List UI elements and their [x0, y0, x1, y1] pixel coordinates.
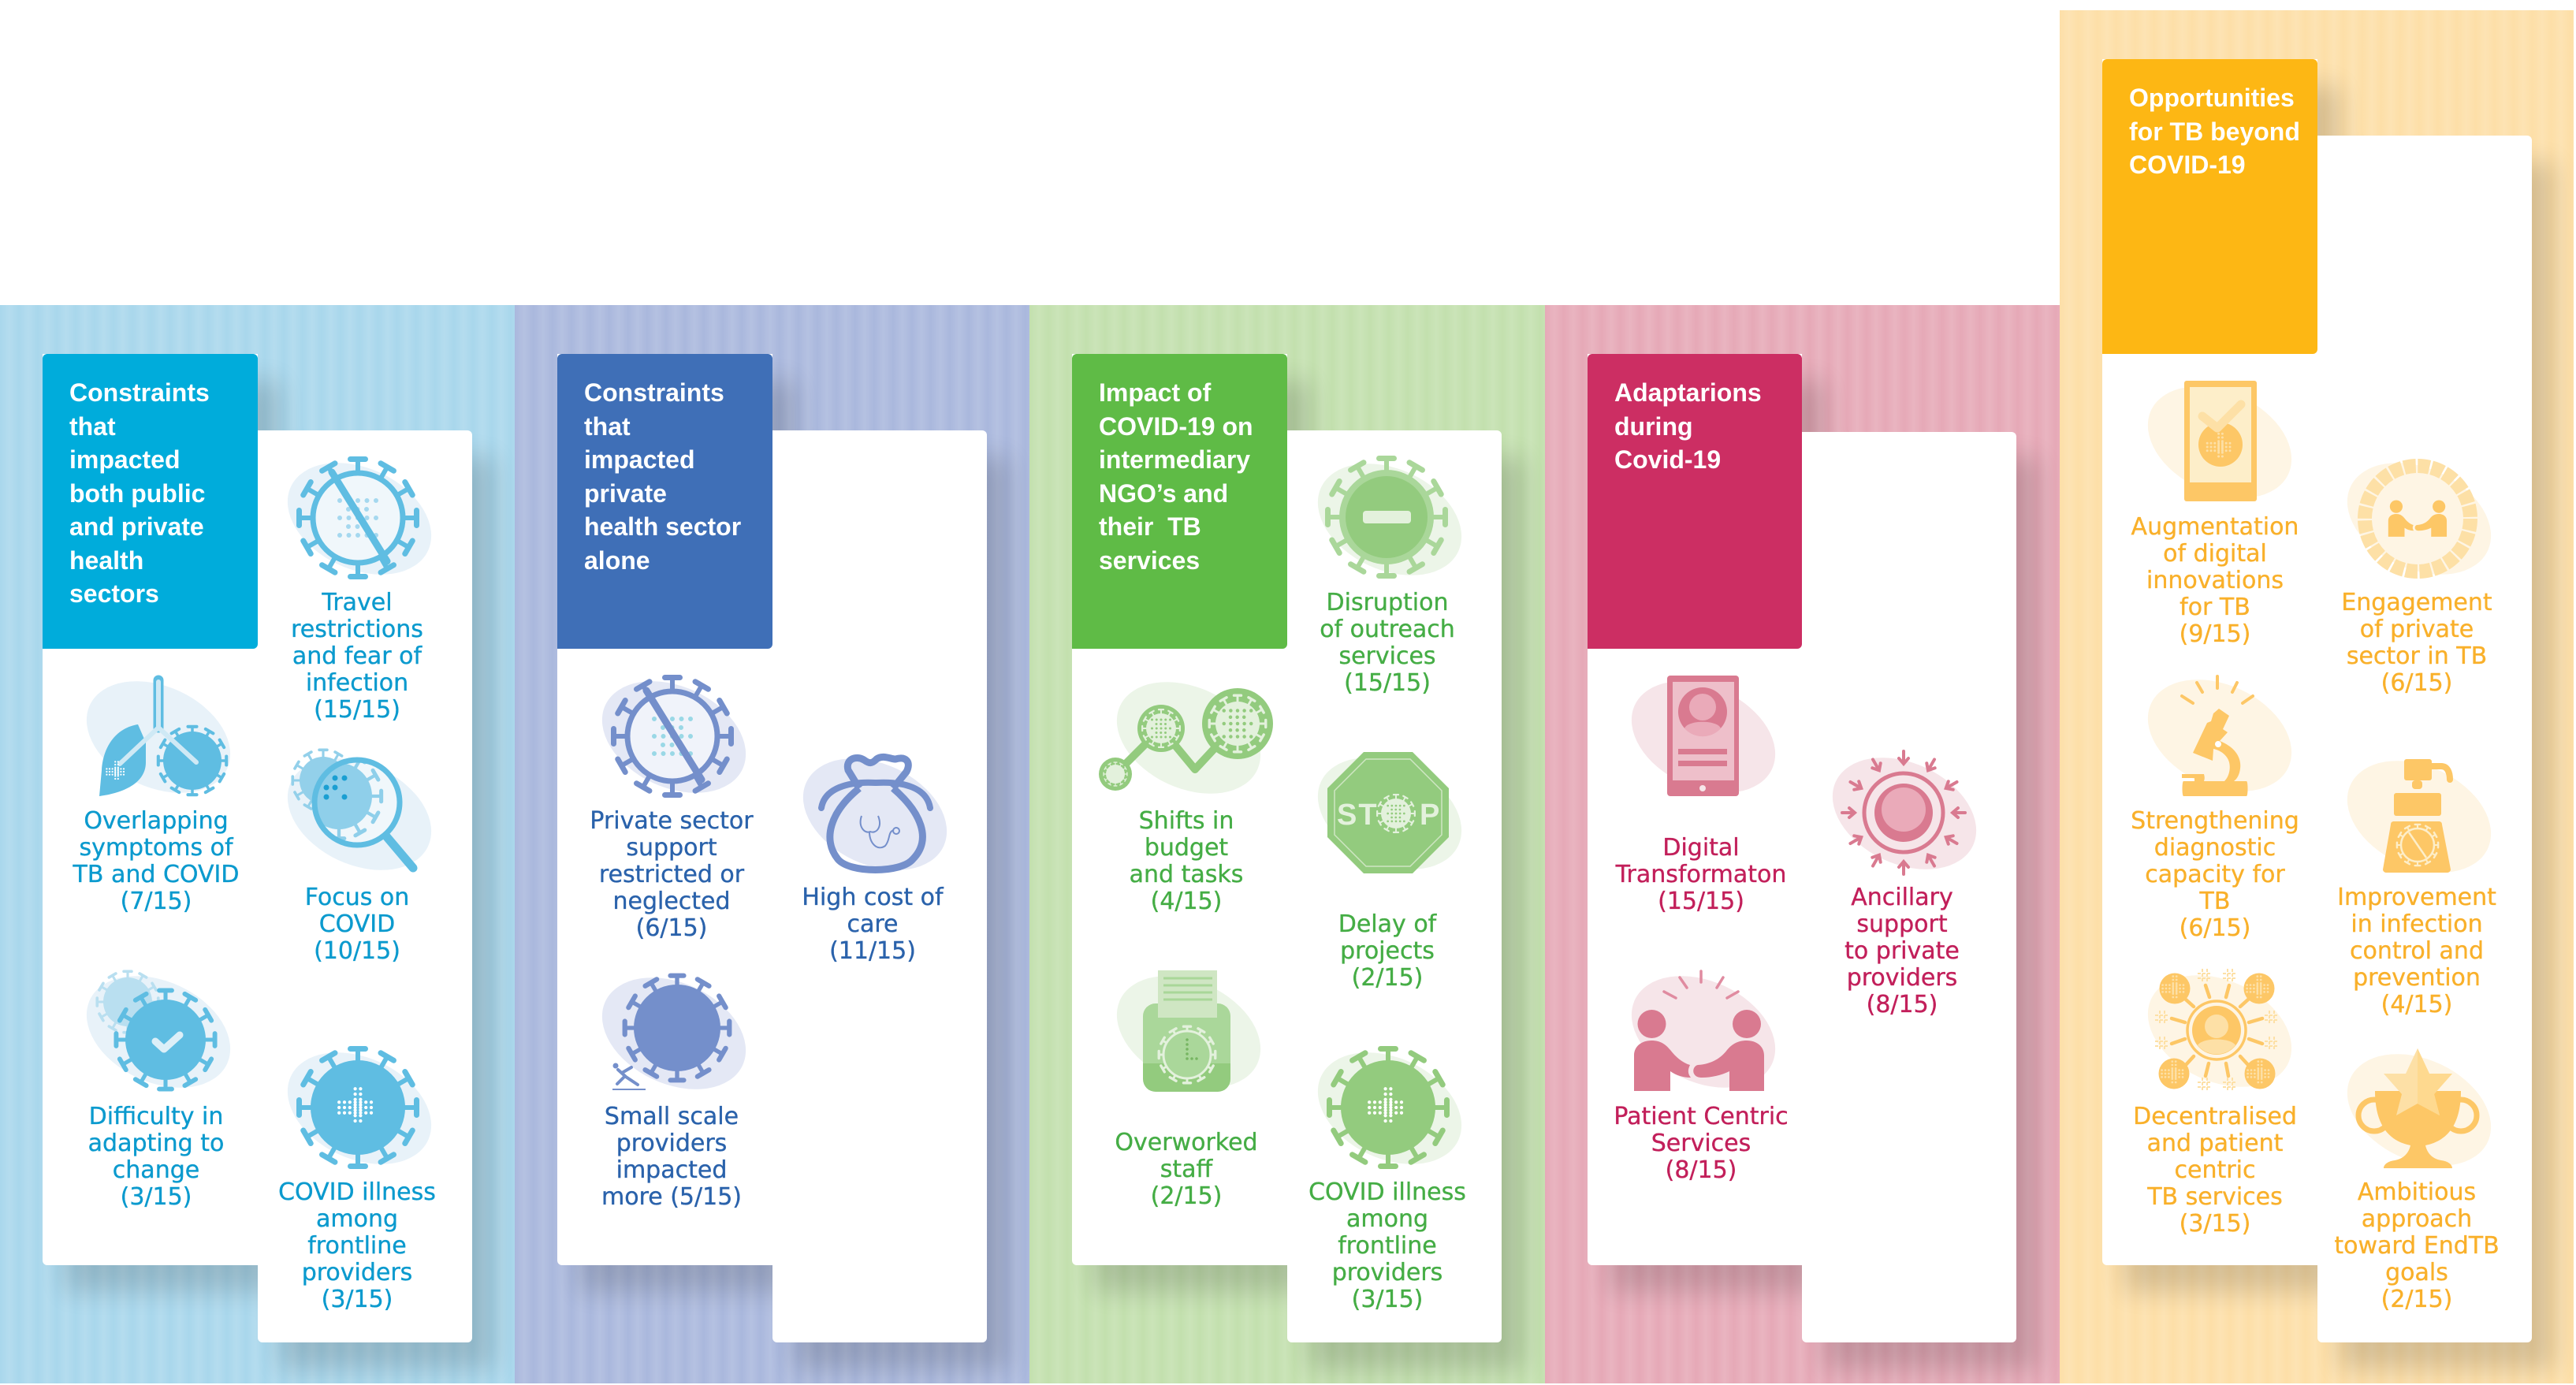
label: shifts in budget — [1130, 807, 1243, 915]
label: infection control: (4/15) — [2381, 991, 2452, 1018]
label: travel restrictions — [291, 589, 423, 724]
label: patient centric services: Services — [1651, 1130, 1751, 1157]
label: digital innovations: innovations — [2146, 567, 2284, 594]
icon: virus with minus — [1318, 456, 1461, 579]
label: strengthening diagnostic capacity: TB — [2200, 888, 2230, 915]
item: decentralised services — [2116, 970, 2314, 1236]
label: patient centric services: Patient Centric — [1614, 1103, 1789, 1130]
item: patient centric services — [1603, 970, 1800, 1182]
panel: impact of covid on NGOs — [1029, 305, 1545, 1383]
label: decentralised services: TB services — [2147, 1183, 2283, 1211]
label: private sector support: neglected — [612, 888, 731, 915]
heading: opportunities: COVID-19 — [2129, 151, 2246, 179]
label: private sector support: (6/15) — [636, 914, 707, 942]
icon: two people handshake — [1631, 970, 1776, 1093]
heading: impact on NGOs: intermediary — [1099, 445, 1250, 474]
label: overlapping symptoms: TB and COVID — [73, 861, 239, 888]
label: delay of projects: projects — [1340, 937, 1435, 965]
panel: opportunities for TB beyond covid-19 — [2060, 10, 2574, 1383]
label: shifts in budget: and tasks — [1130, 861, 1243, 888]
label: small scale providers: impacted — [616, 1156, 727, 1184]
label: ambitious approach: goals — [2385, 1259, 2448, 1286]
label: private sector support: Private sector — [590, 807, 754, 835]
icon: crossed-out virus — [602, 675, 746, 798]
label: private sector support: support — [626, 834, 717, 862]
label: ambitious approach: Ambitious — [2358, 1178, 2476, 1206]
label: disruption: services — [1338, 642, 1436, 670]
label: ambitious approach: (2/15) — [2381, 1286, 2452, 1313]
label: covid illness: among — [316, 1205, 398, 1233]
label: small scale providers: Small scale — [605, 1103, 739, 1130]
heading: opportunities: Opportunities — [2129, 84, 2295, 112]
label: digital innovations: of digital — [2163, 540, 2267, 568]
label: small scale providers: providers — [616, 1130, 727, 1157]
label: decentralised services — [2116, 1104, 2314, 1238]
item: high cost of care — [802, 754, 947, 965]
heading: constraints both sectors: impacted — [69, 445, 180, 474]
panel: constraints impacting both public and private health sectors — [0, 305, 515, 1383]
label: digital innovations: (9/15) — [2180, 620, 2250, 648]
label: covid illness: COVID illness — [1308, 1178, 1466, 1206]
heading: constraints both sectors: health — [69, 545, 143, 574]
heading: opportunities: for TB beyond — [2129, 117, 2300, 145]
label: travel restrictions: restrictions — [291, 616, 423, 643]
label: overlapping symptoms: Overlapping — [84, 807, 229, 835]
item: overworked staff — [1115, 970, 1260, 1210]
label: high cost of care: care — [847, 910, 899, 938]
white card — [1588, 354, 2016, 1342]
heading: constraints private sector: impacted — [584, 445, 694, 474]
icon: lungs and virus — [87, 675, 230, 796]
label: delay of projects — [1338, 910, 1437, 992]
label: covid illness: COVID illness — [278, 1178, 436, 1206]
label: difficulty adapting — [88, 1103, 224, 1211]
heading: impact on NGOs: Impact of — [1099, 378, 1211, 407]
heading: constraints both sectors: that — [69, 411, 116, 440]
label: disruption: of outreach — [1320, 616, 1455, 643]
label: shifts in budget: budget — [1145, 834, 1228, 862]
heading: constraints both sectors: Constraints — [69, 378, 210, 407]
label: digital innovations: for TB — [2180, 594, 2250, 621]
label: patient centric services: (8/15) — [1666, 1156, 1737, 1184]
item: disruption of outreach — [1318, 456, 1461, 697]
label: infection control — [2318, 884, 2515, 1018]
label: patient centric services — [1603, 1104, 1800, 1184]
label: digital transformation: Digital — [1662, 834, 1740, 862]
item: ambitious approach — [2318, 1048, 2515, 1312]
heading: constraints private sector — [557, 354, 772, 649]
item: covid illness among providers — [278, 1046, 436, 1313]
label: difficulty adapting: adapting to — [88, 1130, 224, 1157]
label: focus on covid: Focus on — [305, 884, 409, 911]
item: travel restrictions — [288, 456, 431, 724]
icon: trophy with star — [2347, 1048, 2492, 1171]
item: infection control — [2318, 755, 2515, 1017]
label: overlapping symptoms — [73, 807, 239, 915]
label: overworked staff: (2/15) — [1151, 1182, 1222, 1210]
icon: money bag with stethoscope — [803, 754, 947, 873]
label: shifts in budget: Shifts in — [1139, 807, 1234, 835]
label: infection control: Improvement — [2337, 884, 2496, 911]
item: small scale providers — [601, 973, 746, 1211]
heading: opportunities — [2102, 59, 2317, 354]
label: decentralised services: (3/15) — [2180, 1210, 2250, 1238]
label: engagement of private sector: sector in TB — [2347, 642, 2487, 670]
label: covid illness: among — [1346, 1205, 1428, 1233]
white card — [43, 354, 472, 1342]
label: focus on covid: (10/15) — [314, 937, 400, 965]
label: strengthening diagnostic capacity: capacity for — [2145, 861, 2285, 888]
heading: impact on NGOs: COVID-19 on — [1099, 411, 1253, 440]
heading: constraints both sectors: both public — [69, 479, 205, 508]
label: digital innovations: Augmentation — [2131, 513, 2299, 541]
label: digital transformation — [1603, 835, 1800, 915]
label: travel restrictions: infection — [306, 669, 408, 697]
item: engagement of private sector — [2318, 457, 2515, 695]
label: small scale providers — [601, 1103, 742, 1211]
icon: virus with plus — [1318, 1046, 1461, 1169]
icon: line chart with viruses — [1099, 682, 1273, 794]
label: infection control: prevention — [2353, 964, 2481, 992]
heading: constraints both sectors — [43, 354, 258, 649]
item: ancillary support — [1804, 752, 2001, 1017]
label: overlapping symptoms: symptoms of — [79, 834, 233, 862]
label: delay of projects: (2/15) — [1352, 964, 1423, 992]
heading: constraints private sector: that — [584, 411, 631, 440]
label: covid illness: providers — [1332, 1259, 1442, 1286]
icon: tablet with check — [2147, 381, 2292, 504]
item: strengthening diagnostic capacity — [2116, 674, 2314, 940]
label: covid illness: frontline — [1338, 1232, 1437, 1260]
white card — [557, 354, 987, 1342]
label: ambitious approach — [2318, 1179, 2515, 1313]
label: high cost of care: (11/15) — [829, 937, 916, 965]
label: focus on covid: COVID — [319, 910, 395, 938]
label: strengthening diagnostic capacity: diagnostic — [2154, 834, 2276, 862]
label: private sector support — [590, 807, 754, 942]
label: private sector support: restricted or — [599, 861, 744, 888]
label: ambitious approach: toward EndTB — [2334, 1232, 2500, 1260]
icon: virus and falling person — [602, 973, 746, 1090]
heading: constraints private sector: alone — [584, 545, 650, 574]
icon: stop sign with virus — [1318, 752, 1461, 873]
label: engagement of private sector: Engagement — [2341, 589, 2492, 616]
icon: crossed-out virus — [288, 456, 431, 579]
heading: impact on NGOs: their TB — [1099, 512, 1201, 541]
label: infection control: control and — [2350, 937, 2484, 965]
icon: patient hub with plus nodes — [2147, 970, 2292, 1093]
label: covid illness — [278, 1178, 436, 1313]
heading: adaptations: during — [1614, 411, 1693, 440]
heading: adaptations — [1588, 354, 1802, 649]
label: overworked staff: Overworked — [1115, 1129, 1258, 1156]
label: disruption: Disruption — [1327, 589, 1448, 616]
label: engagement of private sector: of private — [2360, 616, 2474, 643]
heading: impact on NGOs — [1072, 354, 1287, 649]
label: covid illness — [1308, 1178, 1466, 1313]
label: ancillary support: to private — [1845, 937, 1960, 965]
icon: sanitizer pump bottle — [2347, 755, 2492, 878]
label: strengthening diagnostic capacity: Strengthening — [2131, 807, 2299, 835]
item: overlapping symptoms — [73, 675, 239, 915]
label: ancillary support: (8/15) — [1867, 991, 1938, 1018]
label: delay of projects: Delay of — [1338, 910, 1436, 938]
label: difficulty adapting: Difficulty in — [89, 1103, 223, 1130]
label: covid illness: frontline — [307, 1232, 407, 1260]
label: disruption — [1320, 589, 1455, 697]
item: difficulty adapting — [87, 970, 230, 1211]
label: overworked staff: staff — [1160, 1156, 1212, 1183]
item: digital transformation — [1603, 676, 1800, 914]
item: covid illness among providers — [1308, 1046, 1466, 1313]
icon: in-tray with paper and virus clock — [1117, 970, 1260, 1092]
panel: constraints impacting private health sector alone — [515, 305, 1029, 1383]
label: decentralised services: centric — [2175, 1156, 2255, 1184]
label: difficulty adapting: (3/15) — [121, 1183, 192, 1211]
label: strengthening diagnostic capacity: (6/15) — [2180, 914, 2250, 942]
label: covid illness: (3/15) — [1352, 1286, 1423, 1313]
item: digital innovations — [2116, 381, 2314, 646]
heading: constraints private sector: Constraints — [584, 378, 724, 407]
label: travel restrictions: Travel — [322, 589, 393, 616]
heading: constraints both sectors: and private — [69, 512, 204, 541]
label: high cost of care — [802, 884, 944, 965]
label: ancillary support: support — [1856, 910, 1948, 938]
white card — [1072, 354, 1502, 1342]
label: decentralised services: and patient — [2147, 1130, 2283, 1157]
white card — [2102, 59, 2532, 1342]
label: infection control: in infection — [2351, 910, 2483, 938]
label: overworked staff — [1115, 1129, 1258, 1210]
label: travel restrictions: (15/15) — [314, 696, 400, 724]
icon: virus with check mark — [87, 970, 230, 1091]
heading: adaptations: Adaptarions — [1614, 378, 1762, 407]
item: shifts in budget — [1099, 682, 1273, 915]
label: focus on covid — [305, 884, 409, 965]
heading: constraints both sectors: sectors — [69, 579, 159, 608]
label: difficulty adapting: change — [113, 1156, 199, 1184]
icon: microscope — [2147, 674, 2292, 797]
icon: tablet with profile — [1631, 676, 1776, 799]
panel: adaptations during covid-19 — [1545, 305, 2060, 1383]
icon: ring with inward arrows — [1832, 752, 1977, 875]
item: focus on covid — [288, 749, 431, 965]
item: delay of projects — [1318, 752, 1461, 992]
heading: impact on NGOs: services — [1099, 545, 1200, 574]
icon: magnifier over virus — [288, 749, 431, 872]
heading: constraints private sector: private — [584, 479, 667, 508]
heading: impact on NGOs: NGO’s and — [1099, 479, 1228, 508]
heading: adaptations: Covid-19 — [1614, 445, 1721, 474]
label: small scale providers: more (5/15) — [601, 1183, 742, 1211]
label: engagement of private sector: (6/15) — [2381, 669, 2452, 697]
label: strengthening diagnostic capacity — [2116, 808, 2314, 942]
label: ancillary support — [1804, 884, 2001, 1018]
label: engagement of private sector — [2318, 590, 2515, 697]
icon: virus with plus — [288, 1046, 431, 1169]
label: decentralised services: Decentralised — [2133, 1103, 2297, 1130]
heading: constraints private sector: health sector — [584, 512, 741, 541]
label: high cost of care: High cost of — [802, 884, 944, 911]
label: ambitious approach: approach — [2362, 1205, 2472, 1233]
label: covid illness: providers — [302, 1259, 412, 1286]
label: ancillary support: providers — [1847, 964, 1957, 992]
label: digital transformation: (15/15) — [1658, 888, 1744, 915]
label: digital innovations — [2116, 514, 2314, 648]
icon: stop sign with virus: P — [1420, 799, 1439, 832]
label: digital transformation: Transformaton — [1616, 861, 1786, 888]
label: overlapping symptoms: (7/15) — [121, 888, 192, 915]
label: shifts in budget: (4/15) — [1151, 888, 1222, 915]
item: private sector support — [590, 675, 754, 942]
label: covid illness: (3/15) — [322, 1286, 393, 1313]
label: ancillary support: Ancillary — [1851, 884, 1953, 911]
label: travel restrictions: and fear of — [292, 642, 422, 670]
label: disruption: (15/15) — [1344, 669, 1431, 697]
icon: segmented ring handshake — [2347, 457, 2492, 580]
icon: stop sign with virus: ST — [1337, 799, 1379, 832]
